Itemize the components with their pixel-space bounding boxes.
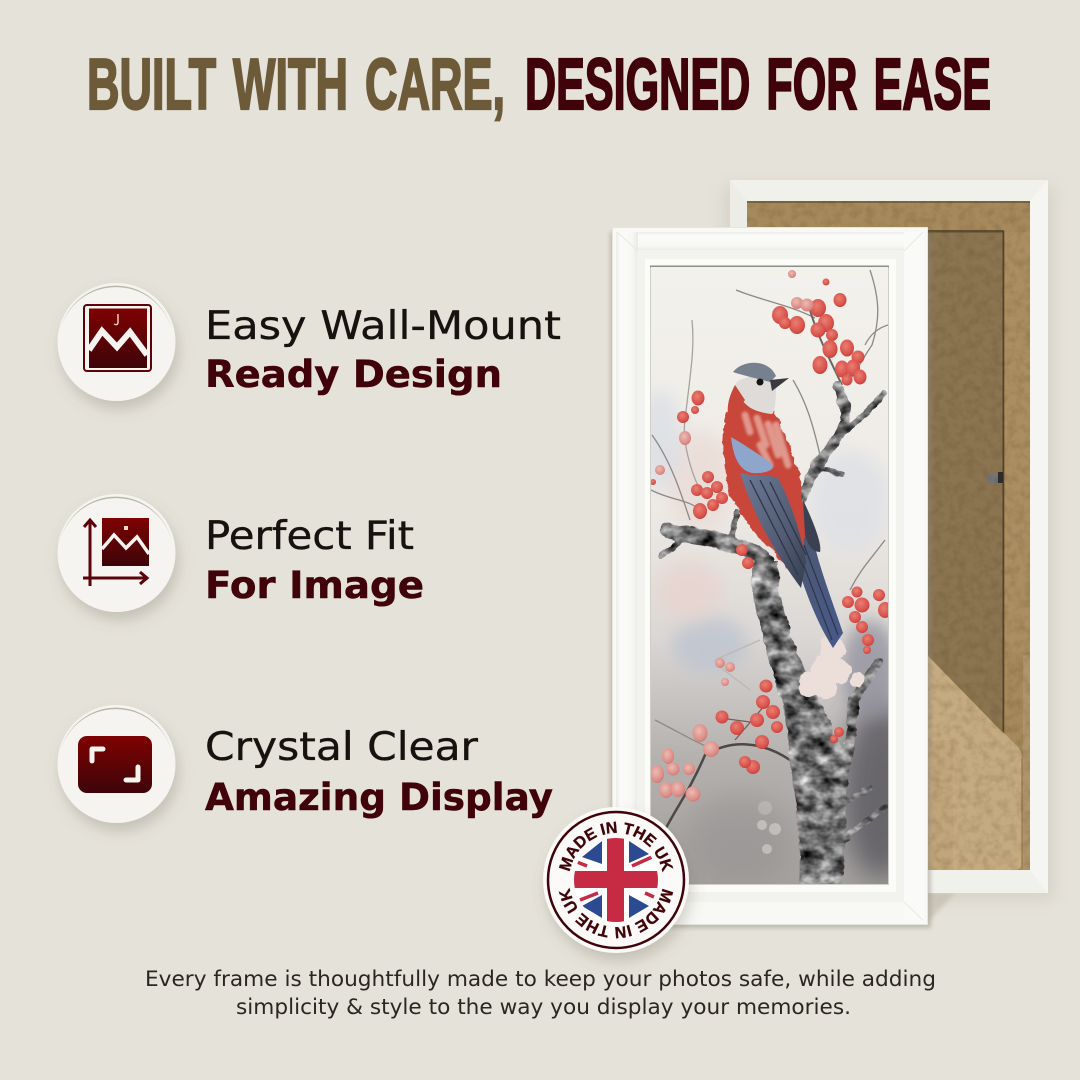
branches: [662, 387, 885, 838]
thin twigs: [651, 270, 888, 830]
title: BUILT WITH CARE,: [87, 45, 505, 125]
feature: crystal clear: [58, 705, 553, 823]
pink berries: [650, 270, 814, 802]
icon badge: display corners: [58, 705, 176, 823]
artwork: bird on berry branch: [651, 267, 888, 884]
head: [735, 376, 776, 414]
feature: perfect fit: [58, 494, 424, 612]
corner flap: [928, 655, 1022, 870]
caption: [145, 967, 936, 1019]
wing: [740, 473, 806, 588]
body: [723, 400, 807, 575]
feature: easy wall-mount: [58, 283, 561, 401]
front frame with artwork: [610, 227, 931, 928]
heading: perfect fit for image: [205, 514, 424, 607]
icon badge: image with dimension arrows: [58, 494, 176, 612]
heading: crystal clear amazing display: Crystal Clear: [205, 725, 479, 770]
icon badge: wall-mount picture: [58, 283, 176, 401]
breast feather highlights: [745, 415, 788, 465]
blossoms: [798, 637, 865, 700]
made in the uk badge: MADE IN THE UK: [558, 888, 674, 938]
main trunk: [752, 560, 847, 884]
heading: easy wall-mount ready design: Easy Wall-Mount: [205, 304, 561, 349]
red berries: [650, 278, 892, 774]
white moulding: [612, 227, 928, 925]
recessed panel: [925, 231, 1004, 731]
made in the uk badge: [542, 807, 698, 966]
hanger clip: [987, 472, 1003, 483]
heading: perfect fit for image: Perfect Fit: [205, 514, 414, 559]
backing board: [747, 201, 1030, 870]
board grain: [747, 201, 1030, 870]
back of frame: [724, 180, 1054, 922]
circular text: MADE IN THE UK: [558, 822, 674, 872]
heading: perfect fit for image: For Image: [205, 564, 424, 607]
union flag: [574, 838, 658, 922]
watercolour washes: [638, 390, 924, 885]
light blue shoulder: [731, 437, 773, 473]
caption: simplicity & style to the way you display your memories.: [236, 995, 851, 1019]
heading: easy wall-mount ready design: [205, 304, 561, 396]
heading: crystal clear amazing display: Amazing Display: [205, 776, 553, 819]
bird: [723, 363, 843, 648]
tail: [802, 536, 843, 648]
dark right feather: [803, 500, 820, 552]
heading: crystal clear amazing display: [205, 725, 553, 819]
heading: easy wall-mount ready design: Ready Design: [205, 353, 502, 396]
caption: Every frame is thoughtfully made to keep your photos safe, while adding: [145, 967, 936, 991]
